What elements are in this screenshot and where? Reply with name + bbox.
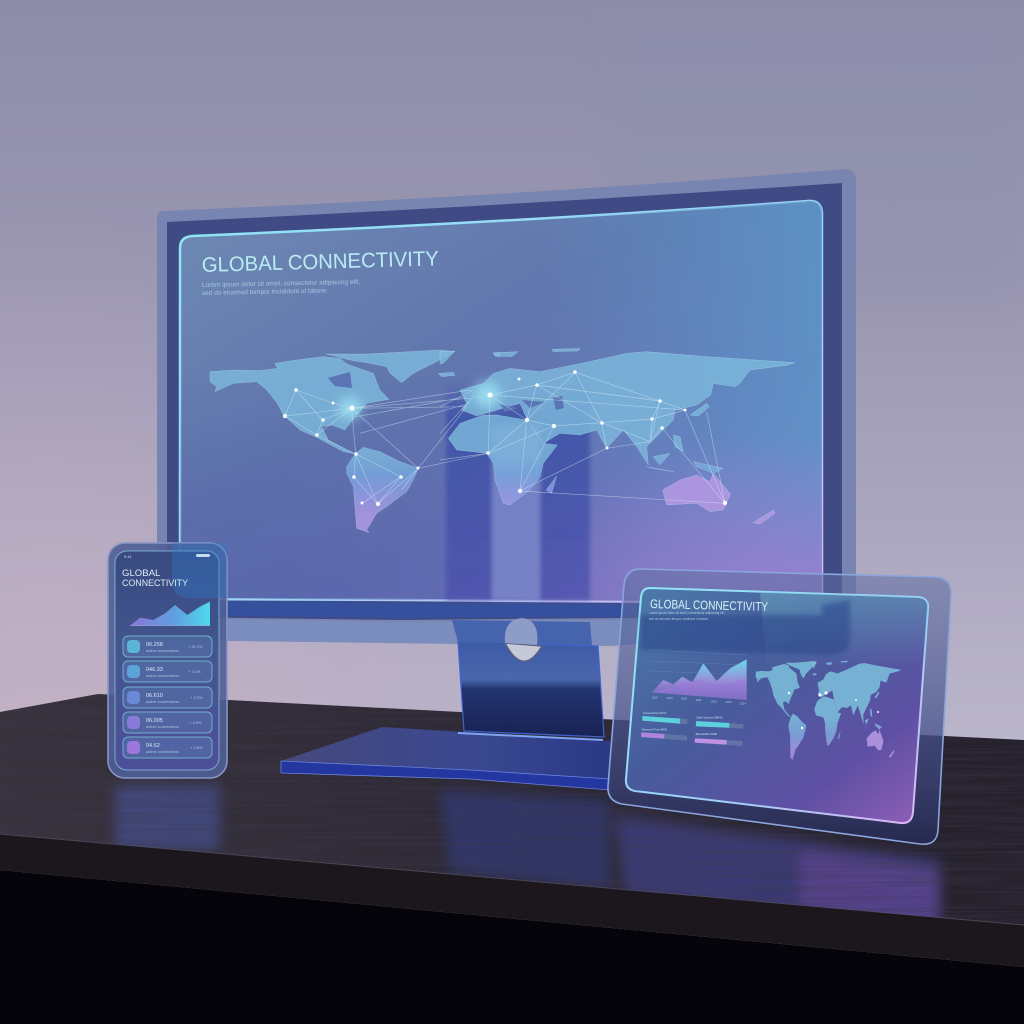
table front shadow bbox=[0, 870, 1024, 1024]
tablet area chart bbox=[650, 650, 747, 706]
phone row values bbox=[146, 642, 203, 754]
tablet subtitle: Lorem ipsum dolor sit amet, consectetur adipiscing elit, bbox=[649, 611, 725, 615]
phone screen bbox=[115, 551, 219, 770]
tablet area chart: 2019 bbox=[667, 696, 673, 700]
cable hole bbox=[505, 643, 542, 661]
tablet progress bars: Data Volume 58942 bbox=[696, 715, 723, 719]
table reflections bbox=[25, 700, 1024, 921]
tablet screen bbox=[626, 588, 928, 823]
phone row values: active connections bbox=[146, 749, 179, 754]
map land masses bbox=[210, 348, 795, 533]
title: GLOBAL CONNECTIVITY bbox=[201, 247, 439, 277]
phone data rows bbox=[123, 636, 212, 758]
tablet area chart: 2023 bbox=[726, 700, 732, 704]
monitor corner seen through tablet bbox=[640, 600, 850, 655]
monitor chin bbox=[157, 618, 856, 646]
phone row values: active connections bbox=[146, 699, 179, 704]
tablet subtitle bbox=[649, 611, 725, 621]
tablet area chart: 2024 bbox=[740, 702, 746, 706]
stand base bbox=[281, 727, 610, 790]
subtitle text: sed do eiusmod tempor incididunt ut labore. bbox=[202, 287, 328, 297]
network lines: eurasia bbox=[440, 372, 725, 503]
wooden table bbox=[0, 694, 1024, 1024]
tablet bbox=[608, 569, 951, 844]
phone title bbox=[122, 568, 189, 589]
phone row values: active connections bbox=[146, 673, 179, 678]
stand upper joint bbox=[452, 620, 592, 645]
inland seas bbox=[328, 372, 564, 412]
monitor inner bezel bbox=[167, 183, 842, 620]
tablet area chart: 2020 bbox=[681, 697, 687, 701]
monitor bbox=[157, 169, 856, 646]
phone body bbox=[108, 543, 227, 778]
tablet area chart: 2018 bbox=[652, 695, 658, 699]
phone row values: + 3.8% bbox=[190, 745, 203, 750]
phone row values: 04.62 bbox=[146, 743, 160, 749]
phone row values: + 4.5% bbox=[189, 720, 202, 725]
phone row values: 06.258 bbox=[146, 642, 163, 648]
phone area chart bbox=[130, 602, 210, 626]
tablet progress bars: Bandwidth 1896 bbox=[696, 732, 717, 736]
tablet body bbox=[608, 569, 951, 844]
monitor screen bbox=[180, 201, 822, 603]
table edge highlight bbox=[0, 834, 1024, 925]
monitor frame bbox=[157, 169, 856, 645]
tablet world map bbox=[754, 659, 901, 762]
phone row values: 06.610 bbox=[146, 693, 163, 699]
phone status bar: 9:41 bbox=[124, 554, 133, 559]
subtitle text bbox=[202, 279, 360, 297]
phone row values: + 41.3% bbox=[188, 644, 203, 649]
phone title: CONNECTIVITY bbox=[122, 578, 189, 589]
network glow bbox=[339, 382, 500, 419]
cable hole reflection bbox=[505, 618, 537, 645]
table fascia bbox=[0, 834, 1024, 967]
chin dark band bbox=[157, 600, 856, 618]
screen glow overlay bbox=[180, 201, 822, 603]
phone row values: active connections bbox=[146, 648, 179, 653]
screen corner shades bbox=[180, 300, 822, 602]
tablet area chart: 2021 bbox=[696, 698, 702, 702]
tablet area chart: 2022 bbox=[711, 699, 717, 703]
phone title: GLOBAL bbox=[122, 568, 161, 579]
phone row values: + 3.1% bbox=[188, 669, 201, 674]
neck foot highlight bbox=[458, 733, 603, 740]
monitor stand bbox=[281, 618, 610, 790]
phone bbox=[108, 543, 227, 778]
tablet title: GLOBAL CONNECTIVITY bbox=[650, 597, 769, 614]
tablet progress bars: Connections 82.8 bbox=[643, 711, 667, 715]
phone row values: + 2.0% bbox=[190, 695, 203, 700]
network nodes bbox=[283, 370, 727, 506]
tablet progress bars: Network Flow 4842 bbox=[642, 728, 668, 732]
stand neck bbox=[458, 641, 604, 737]
phone row icons bbox=[127, 640, 140, 754]
tablet upper right sheen bbox=[760, 592, 928, 745]
network lines: americas bbox=[285, 390, 488, 504]
phone row values: 046.33 bbox=[146, 667, 163, 673]
tablet subtitle: sed do eiusmod tempor incididunt ut labore. bbox=[649, 617, 709, 621]
reflection band bbox=[446, 378, 590, 600]
phone status bar bbox=[124, 554, 210, 559]
tablet progress bars bbox=[641, 711, 743, 746]
world map bbox=[210, 348, 795, 533]
phone row values: active connections bbox=[146, 724, 179, 729]
base front edge bbox=[281, 761, 610, 790]
phone row values: 06.005 bbox=[146, 718, 163, 724]
monitor seen through phone bbox=[172, 543, 227, 598]
subtitle text: Lorem ipsum dolor sit amet, consectetur adipiscing elit, bbox=[202, 279, 360, 289]
